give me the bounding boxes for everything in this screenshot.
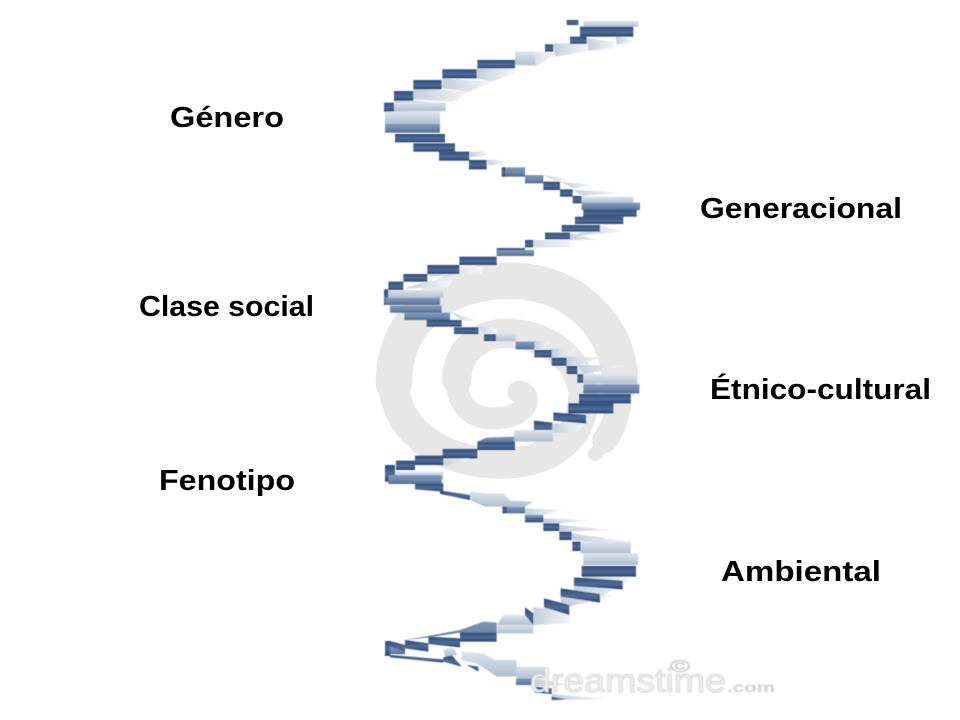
label: Ambiental: Ambiental — [721, 556, 881, 588]
watermark spiral — [394, 281, 620, 463]
label: Clase social: Clase social — [139, 291, 314, 323]
label: Generacional: Generacional — [700, 193, 902, 225]
watermark: dreamstime.com — [530, 657, 775, 699]
staircase: lower turn — [385, 475, 638, 700]
watermark: dreamstime.com: © — [670, 657, 691, 676]
staircase: middle turn — [384, 250, 639, 482]
label: Fenotipo: Fenotipo — [159, 465, 295, 497]
staircase: upper turn — [384, 20, 640, 250]
spiral staircase — [384, 20, 640, 700]
watermark: dreamstime.com: dreamstime — [530, 662, 726, 699]
label: Étnico-cultural: Étnico-cultural — [710, 372, 931, 406]
watermark: dreamstime.com: .com — [727, 679, 775, 695]
label: Género: Género — [170, 102, 284, 134]
